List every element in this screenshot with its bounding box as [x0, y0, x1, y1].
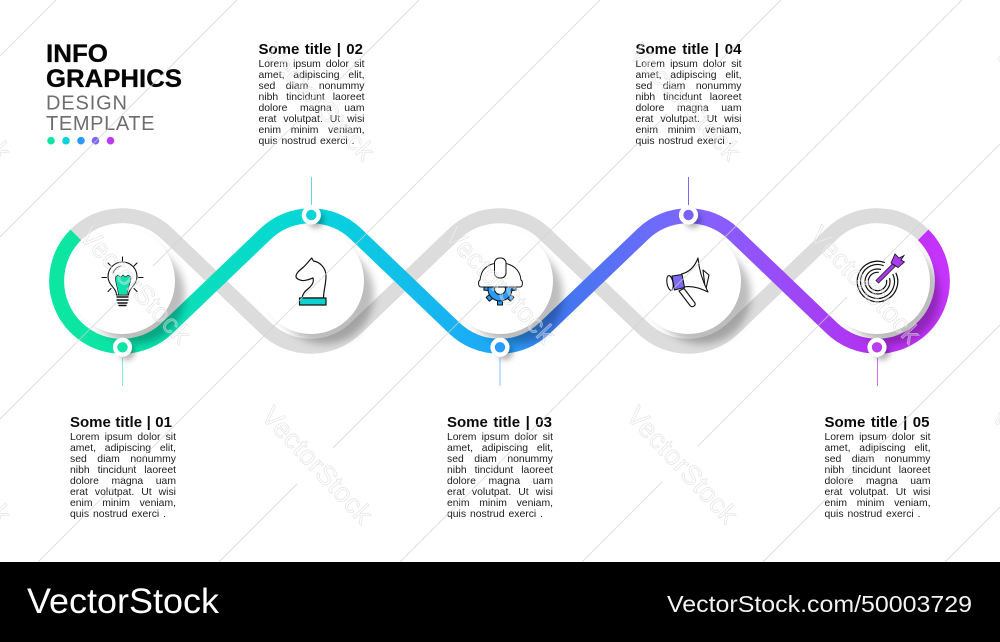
node 5 — [867, 338, 887, 357]
text block 05: dolore magna uam — [824, 476, 930, 487]
text block 03: enim minim veniam, — [447, 498, 553, 509]
node 1 — [113, 338, 132, 357]
text block 03: erat volutpat. Ut wisi — [447, 487, 553, 498]
text block 04: enim minim veniam, — [636, 125, 742, 136]
icon: target with dart — [851, 254, 904, 308]
stem 4 — [688, 177, 690, 205]
text block 05: erat volutpat. Ut wisi — [824, 487, 930, 498]
text block 01: sed diam nonummy — [70, 454, 176, 465]
title heading: TEMPLATE — [46, 113, 154, 135]
text block 03: nibh tincidunt laoreet — [447, 465, 553, 476]
text block 02: quis nostrud exerci . — [258, 136, 354, 147]
text block 01 — [70, 414, 176, 520]
stem 2 — [310, 177, 312, 205]
white discs — [69, 228, 930, 334]
shadows of discs 2 and 4 — [315, 285, 702, 295]
text block 01: enim minim veniam, — [70, 498, 176, 509]
text block 01: nibh tincidunt laoreet — [70, 465, 176, 476]
text block 03: Lorem ipsum dolor sit — [447, 432, 553, 443]
text block 04 — [636, 40, 742, 147]
text block 04: dolore magna uam — [636, 103, 742, 114]
shadows of discs 1, 3 and 5 — [126, 285, 891, 295]
text block 04: nibh tincidunt laoreet — [636, 92, 742, 103]
text block 02: Lorem ipsum dolor sit — [258, 59, 364, 70]
footer url: VectorStock.com/50003729 — [667, 591, 972, 617]
infographic canvas: Some title | 02 — [258, 40, 363, 58]
text block 05 — [824, 414, 930, 520]
text block 02: nibh tincidunt laoreet — [258, 92, 364, 103]
title heading: DESIGN — [46, 92, 127, 114]
title heading: INFO — [46, 40, 108, 68]
text block 03: amet, adipiscing elit, — [447, 443, 553, 454]
text block 01: erat volutpat. Ut wisi — [70, 487, 176, 498]
watermark overlay: VectorStock — [804, 221, 927, 350]
text block 05: nibh tincidunt laoreet — [824, 465, 930, 476]
watermark overlay: VectorStock — [621, 401, 744, 530]
text block 05: sed diam nonummy — [824, 454, 930, 465]
infographic canvas: Some title | 03 — [447, 414, 552, 430]
watermark overlay: VectorStock — [74, 221, 197, 350]
text block 04: amet, adipiscing elit, — [636, 70, 742, 81]
icon: hard hat and gear — [479, 258, 522, 305]
text block 02 — [258, 40, 364, 147]
text block 01: dolore magna uam — [70, 476, 176, 487]
text block 04: sed diam nonummy — [636, 81, 742, 92]
text block 02: sed diam nonummy — [258, 81, 364, 92]
text block 03: quis nostrud exerci . — [447, 509, 543, 520]
text block 05: Lorem ipsum dolor sit — [824, 432, 930, 443]
text block 02: enim minim veniam, — [258, 125, 364, 136]
node 4 — [679, 205, 698, 225]
text block 03 — [447, 414, 553, 520]
text block 02: erat volutpat. Ut wisi — [258, 114, 364, 125]
icon: chess knight — [296, 258, 326, 305]
colour dots — [47, 137, 114, 144]
title heading: GRAPHICS — [46, 65, 182, 93]
infographic canvas: Some title | 05 — [824, 414, 930, 430]
footer bar — [0, 562, 1000, 642]
footer logo text: VectorStock — [27, 582, 220, 621]
infographic canvas: Some title | 04 — [636, 40, 742, 58]
coloured wave band — [57, 216, 942, 346]
node shadows — [119, 212, 890, 360]
text block 03: dolore magna uam — [447, 476, 553, 487]
stem 5 — [876, 358, 878, 386]
icon: megaphone — [666, 258, 709, 307]
text block 04: erat volutpat. Ut wisi — [636, 114, 742, 125]
watermark overlay: VectorStock — [258, 38, 381, 167]
text block 04: Lorem ipsum dolor sit — [636, 59, 742, 70]
text block 01: Lorem ipsum dolor sit — [70, 432, 176, 443]
node 2 — [302, 205, 321, 225]
text block 03: sed diam nonummy — [447, 454, 553, 465]
node 3 — [490, 338, 510, 357]
title heading — [46, 40, 182, 135]
text block 01: quis nostrud exerci . — [70, 509, 166, 520]
watermark overlay: VectorStock — [256, 401, 379, 530]
watermark overlay: VectorStock — [624, 38, 747, 167]
text block 05: quis nostrud exerci . — [824, 509, 920, 520]
text block 04: quis nostrud exerci . — [636, 136, 732, 147]
icon: light bulb — [102, 257, 143, 306]
infographic canvas: Some title | 01 — [70, 414, 172, 430]
stem 1 — [122, 358, 124, 386]
text block 01: amet, adipiscing elit, — [70, 443, 176, 454]
watermark overlay: VectorStock — [439, 221, 562, 350]
text block 05: amet, adipiscing elit, — [824, 443, 930, 454]
text block 02: dolore magna uam — [258, 103, 364, 114]
text block 05: enim minim veniam, — [824, 498, 930, 509]
stem 3 — [499, 358, 501, 386]
text block 02: amet, adipiscing elit, — [258, 70, 364, 81]
grey wave band — [76, 216, 923, 346]
